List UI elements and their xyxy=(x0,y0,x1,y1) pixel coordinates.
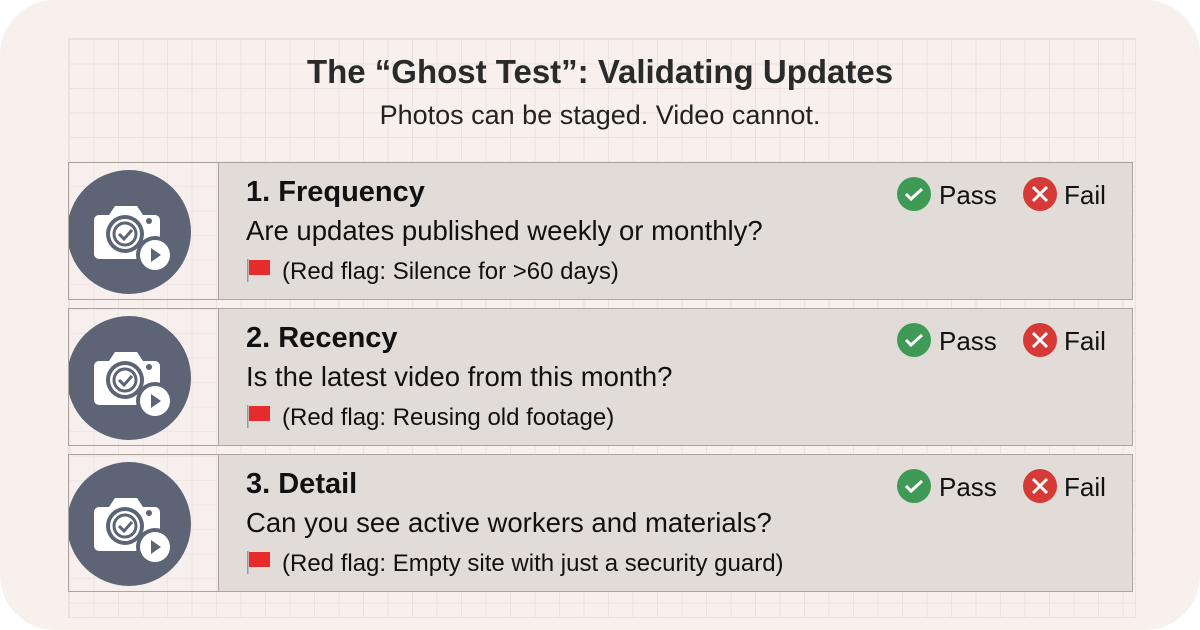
heading: 1. Frequency xyxy=(246,176,425,208)
pass fail badges: Pass xyxy=(939,472,997,502)
question: Is the latest video from this month? xyxy=(246,361,672,392)
question: Are updates published weekly or monthly? xyxy=(246,215,763,246)
panel: row 1 frequency xyxy=(68,162,1133,300)
pass fail badges xyxy=(897,177,1106,211)
icon: camera xyxy=(68,162,219,300)
pass fail badges: Fail xyxy=(1064,326,1106,356)
icon: camera xyxy=(68,308,219,446)
heading: 2. Recency xyxy=(246,322,398,354)
icon: camera xyxy=(68,454,219,592)
red flag note: (Red flag: Empty site with just a security guard) xyxy=(282,550,784,577)
heading: 3. Detail xyxy=(246,468,357,500)
pass fail badges xyxy=(897,469,1106,503)
pass fail badges: Pass xyxy=(939,180,997,210)
panel: row 2 recency xyxy=(68,308,1133,446)
pass fail badges: Fail xyxy=(1064,180,1106,210)
pass fail badges: Pass xyxy=(939,326,997,356)
panel: row 3 detail xyxy=(68,454,1133,592)
subtitle: Photos can be staged. Video cannot. xyxy=(380,100,820,130)
pass fail badges: Fail xyxy=(1064,472,1106,502)
title: The “Ghost Test”: Validating Updates xyxy=(307,53,893,90)
question: Can you see active workers and materials? xyxy=(246,507,772,538)
red flag note: (Red flag: Reusing old footage) xyxy=(282,404,614,431)
pass fail badges xyxy=(897,323,1106,357)
red flag note: (Red flag: Silence for >60 days) xyxy=(282,258,619,285)
